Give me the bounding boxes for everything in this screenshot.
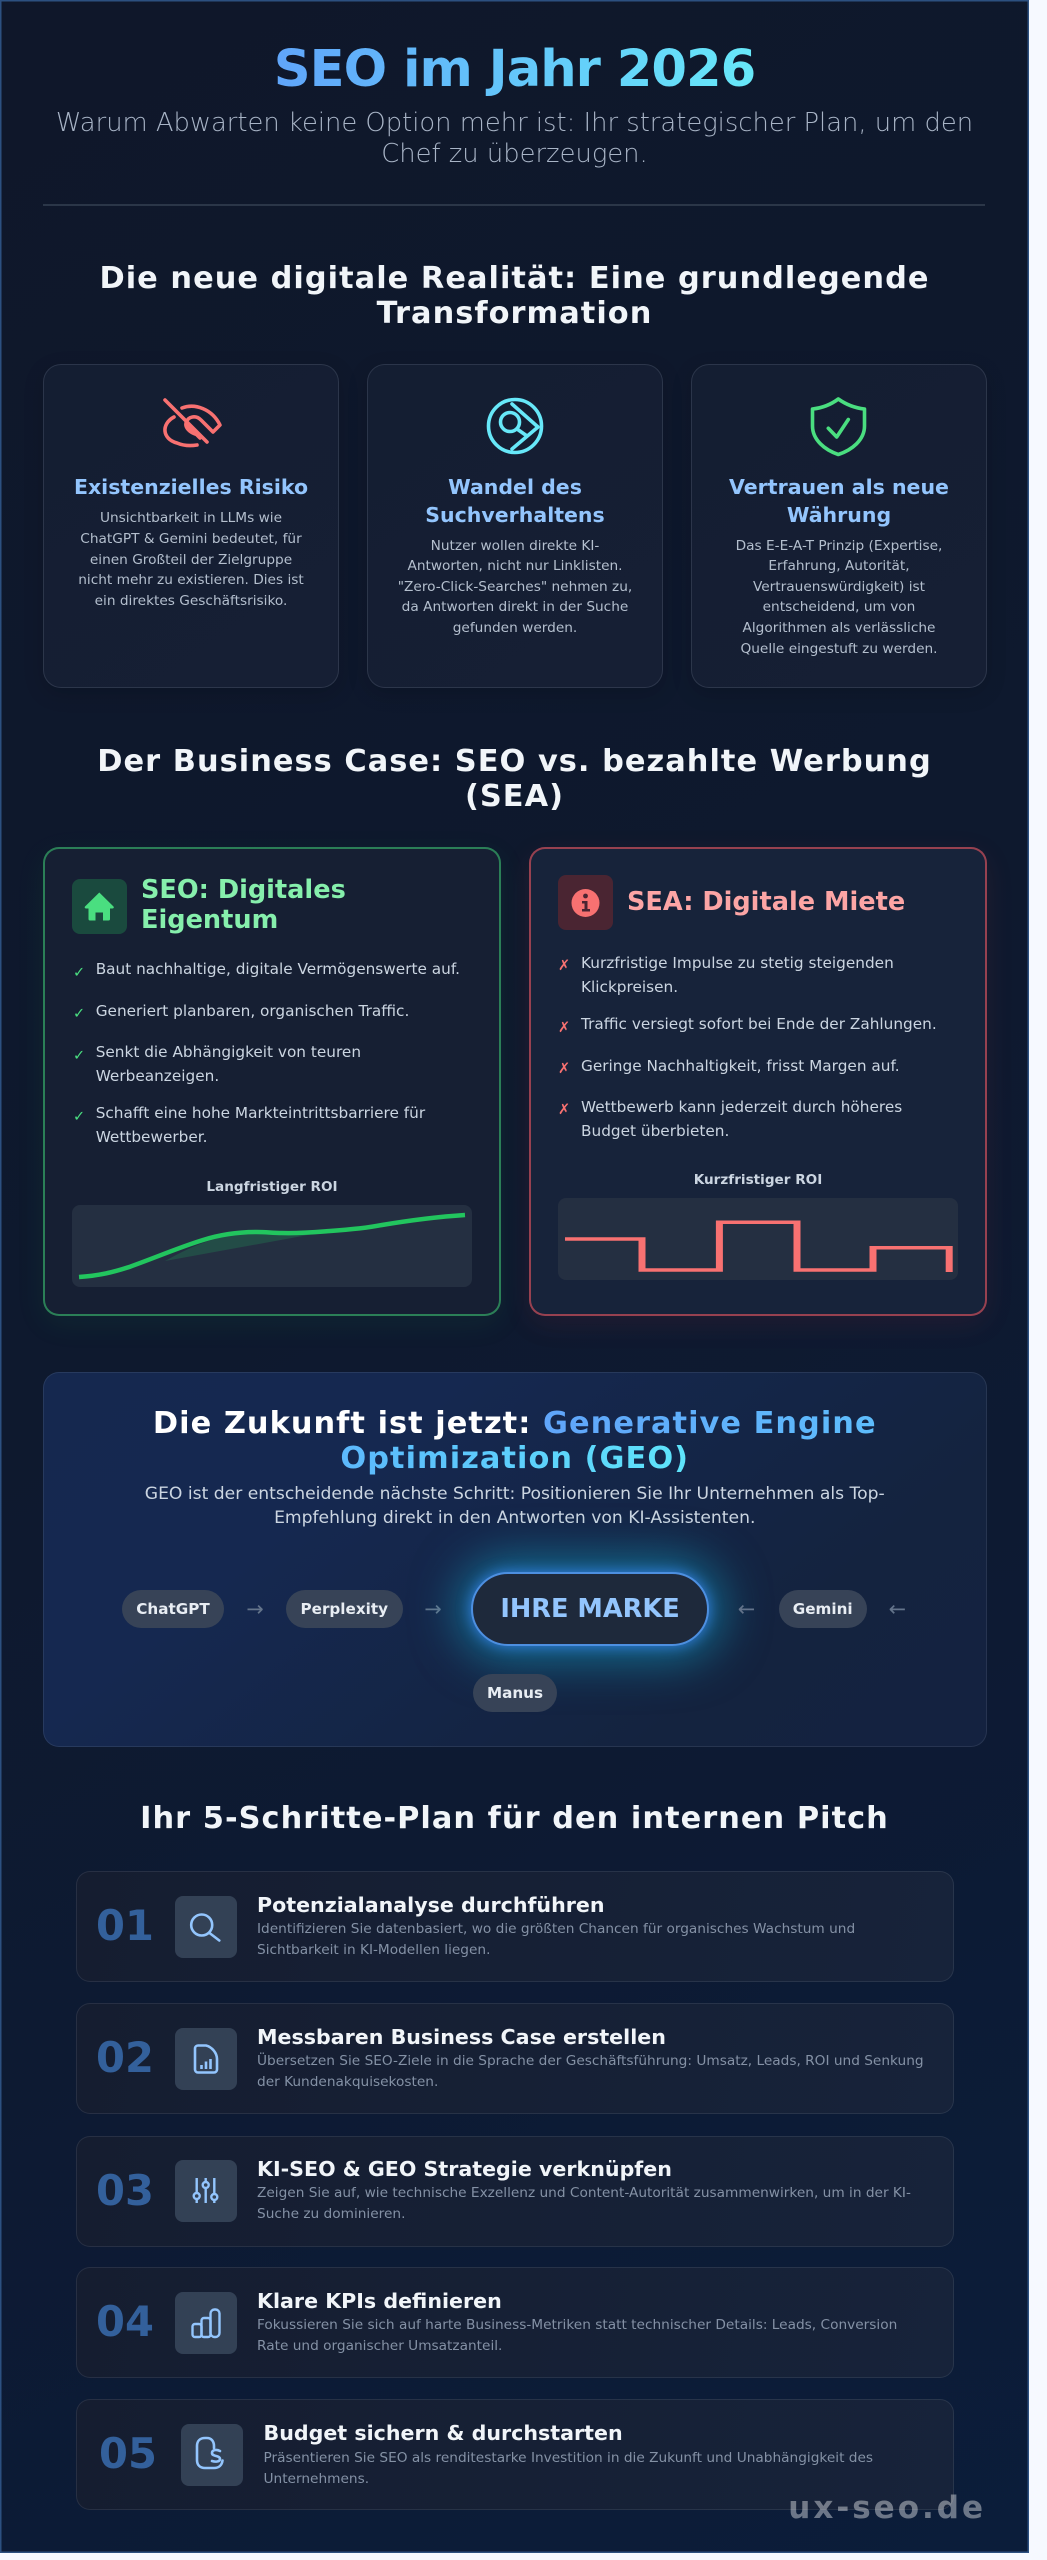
card text: ChatGPT & Gemini bedeutet, für bbox=[80, 531, 302, 547]
arrow: → bbox=[424, 1597, 442, 1621]
pill: Gemini bbox=[779, 1590, 867, 1628]
seo benefits list: ✓ bbox=[73, 1109, 85, 1125]
icon: magnifier bbox=[175, 1896, 237, 1958]
step text: Fokussieren Sie sich auf harte Business-Metriken statt technischer Details: Leads, Conversion bbox=[257, 2317, 897, 2333]
icon: eye off bbox=[163, 398, 222, 448]
step text bbox=[257, 2317, 897, 2354]
geo heading: Optimization (GEO) bbox=[340, 1440, 689, 1476]
step text: Suche zu dominieren. bbox=[257, 2206, 405, 2222]
subtitle: Chef zu überzeugen. bbox=[381, 138, 648, 168]
card text: Nutzer wollen direkte KI- bbox=[431, 538, 599, 554]
step 5 bbox=[76, 2399, 954, 2510]
divider bbox=[43, 204, 985, 206]
step text bbox=[257, 2052, 924, 2090]
card text: nicht mehr zu existieren. Dies ist bbox=[78, 572, 304, 588]
pill: Manus bbox=[473, 1674, 557, 1712]
step text: Zeigen Sie auf, wie technische Exzellenz und Content-Autorität zusammenwirken, um in der KI- bbox=[257, 2185, 911, 2201]
icon: shield check bbox=[810, 397, 866, 456]
card title: Wandel des bbox=[448, 475, 582, 499]
step title: Potenzialanalyse durchführen bbox=[257, 1893, 605, 1917]
heading: digitale Realität: Die neue digitale Realität: Eine grundlegende bbox=[99, 260, 930, 296]
heading: digitale Realität bbox=[99, 260, 930, 330]
icon: house bbox=[72, 879, 126, 934]
card text: da Antworten direkt in der Suche bbox=[402, 599, 628, 615]
icon: bar chart bbox=[175, 2292, 237, 2354]
card title: Vertrauen als neue bbox=[729, 475, 949, 499]
heading: Business Case: Der Business Case: SEO vs. bezahlte Werbung bbox=[97, 744, 932, 778]
sea drawbacks list bbox=[558, 954, 937, 1140]
panel: GEO bbox=[43, 1372, 986, 1747]
step title: Messbaren Business Case erstellen bbox=[257, 2025, 666, 2049]
seo benefits list: Wettbewerber. bbox=[96, 1128, 208, 1146]
brand badge: IHRE MARKE bbox=[500, 1594, 680, 1624]
geo text: Empfehlung direkt in den Antworten von KI-Assistenten. bbox=[274, 1508, 755, 1528]
subtitle: Warum Abwarten keine Option mehr ist: Ihr strategischer Plan, um den bbox=[56, 108, 973, 138]
geo heading: Die Zukunft ist jetzt: Generative Engine bbox=[153, 1406, 877, 1440]
title: SEO im Jahr 2026 bbox=[274, 39, 755, 99]
pill: ChatGPT bbox=[122, 1590, 224, 1628]
card text: entscheidend, um von bbox=[763, 599, 915, 615]
card text: einen Großteil der Zielgruppe bbox=[90, 552, 292, 568]
chart title: Kurzfristiger ROI bbox=[694, 1172, 822, 1188]
pill: Perplexity bbox=[286, 1590, 402, 1628]
seo benefits list: Schafft eine hohe Markteintrittsbarriere für bbox=[96, 1104, 425, 1122]
step text bbox=[257, 2185, 911, 2222]
pill: Gemini: Gemini bbox=[793, 1600, 853, 1618]
step text bbox=[257, 1921, 855, 1958]
pill: Perplexity: Perplexity bbox=[301, 1600, 388, 1618]
step text: Rate und organischer Umsatzanteil. bbox=[257, 2338, 502, 2354]
step text bbox=[264, 2450, 873, 2487]
heading: Business Case: (SEA) bbox=[465, 778, 564, 814]
sea drawbacks list: ✗ bbox=[558, 1102, 570, 1118]
seo benefits list: ✓ bbox=[73, 1006, 85, 1022]
card text: Unsichtbarkeit in LLMs wie bbox=[100, 510, 282, 526]
step chart: short-term ROI bbox=[558, 1198, 958, 1280]
number: 05 bbox=[99, 2429, 157, 2478]
sea drawbacks list: Geringe Nachhaltigkeit, frisst Margen auf. bbox=[581, 1057, 900, 1075]
seo benefits list: Senkt die Abhängigkeit von teuren bbox=[96, 1043, 361, 1061]
step title: Budget sichern & durchstarten bbox=[264, 2421, 623, 2445]
step text: Präsentieren Sie SEO als renditestarke Investition in die Zukunft und Unabhängigkeit des bbox=[264, 2450, 873, 2466]
step title: KI-SEO & GEO Strategie verknüpfen bbox=[257, 2157, 672, 2181]
icon: money device bbox=[181, 2424, 243, 2486]
sea drawbacks list: Traffic versiegt sofort bei Ende der Zahlungen. bbox=[581, 1015, 937, 1033]
card text: Quelle eingestuft zu werden. bbox=[740, 641, 938, 657]
card title: Existenzielles Risiko bbox=[74, 475, 308, 499]
chart title: Langfristiger ROI bbox=[206, 1179, 338, 1195]
icon: info bbox=[558, 875, 613, 930]
panel: Wandel des Suchverhaltens bbox=[367, 364, 663, 688]
pill: Manus: Manus bbox=[487, 1684, 543, 1702]
seo title: SEO: Digitales bbox=[141, 874, 346, 904]
step 3 bbox=[76, 2136, 954, 2247]
sea drawbacks list: ✗ bbox=[558, 1061, 570, 1077]
heading: digitale Realität: Transformation bbox=[377, 296, 652, 330]
panel: Vertrauen als neue Währung bbox=[691, 364, 987, 688]
geo text bbox=[145, 1484, 885, 1528]
panel: Existenzielles Risiko bbox=[43, 364, 339, 688]
arrow: ← bbox=[738, 1597, 755, 1621]
sea drawbacks list: Wettbewerb kann jederzeit durch höheres bbox=[581, 1098, 902, 1116]
number: 02 bbox=[96, 2033, 154, 2082]
card text bbox=[398, 538, 632, 636]
step text: Identifizieren Sie datenbasiert, wo die größten Chancen für organisches Wachstum und bbox=[257, 1921, 855, 1937]
arrow: ← bbox=[889, 1597, 906, 1621]
icon: sliders bbox=[175, 2160, 237, 2222]
number: 01 bbox=[96, 1901, 154, 1950]
step title: Klare KPIs definieren bbox=[257, 2289, 502, 2313]
geo heading bbox=[153, 1406, 877, 1476]
seo benefits list: Werbeanzeigen. bbox=[96, 1067, 219, 1085]
card text bbox=[78, 510, 304, 609]
arrow: → bbox=[246, 1597, 264, 1621]
brand badge bbox=[471, 1572, 709, 1646]
card text: Erfahrung, Autorität, bbox=[768, 558, 910, 574]
heading: 5 steps: Ihr 5-Schritte-Plan für den internen Pitch bbox=[140, 1800, 889, 1836]
card text bbox=[736, 538, 942, 657]
seo benefits list bbox=[73, 960, 460, 1146]
panel: SEO bbox=[43, 847, 501, 1316]
step 1 bbox=[76, 1871, 954, 1982]
step text: Sichtbarkeit in KI-Modellen liegen. bbox=[257, 1942, 490, 1958]
seo benefits list: ✓ bbox=[73, 965, 85, 981]
icon: search in circle bbox=[486, 398, 544, 454]
seo benefits list: Generiert planbaren, organischen Traffic. bbox=[96, 1002, 409, 1020]
sea drawbacks list: Klickpreisen. bbox=[581, 978, 678, 996]
sea title: SEA: Digitale Miete bbox=[627, 887, 905, 917]
step text: Unternehmens. bbox=[264, 2471, 369, 2487]
card text: ein direktes Geschäftsrisiko. bbox=[95, 593, 287, 609]
panel: SEA bbox=[529, 847, 987, 1316]
seo benefits list: Baut nachhaltige, digitale Vermögenswerte auf. bbox=[96, 960, 460, 978]
sea drawbacks list: Kurzfristige Impulse zu stetig steigenden bbox=[581, 954, 894, 972]
watermark: ux-seo.de bbox=[788, 2490, 986, 2526]
card text: Vertrauenswürdigkeit) ist bbox=[753, 579, 925, 595]
seo title: Eigentum bbox=[141, 905, 278, 935]
card text: "Zero-Click-Searches" nehmen zu, bbox=[398, 579, 632, 595]
card text: Algorithmen als verlässliche bbox=[742, 620, 935, 636]
card title: Suchverhaltens bbox=[425, 502, 605, 526]
card title: Währung bbox=[787, 502, 891, 526]
seo benefits list: ✓ bbox=[73, 1048, 85, 1064]
step 2 bbox=[76, 2003, 954, 2114]
step 4 bbox=[76, 2267, 954, 2378]
geo text: GEO ist der entscheidende nächste Schritt: Positionieren Sie Ihr Unternehmen als Top- bbox=[145, 1484, 885, 1504]
card text: Das E-E-A-T Prinzip (Expertise, bbox=[736, 538, 942, 554]
number: 03 bbox=[96, 2166, 154, 2215]
step text: der Kundenakquisekosten. bbox=[257, 2074, 438, 2090]
sea drawbacks list: ✗ bbox=[558, 1020, 570, 1036]
pill: ChatGPT: ChatGPT bbox=[136, 1600, 210, 1618]
card text: Antworten, nicht nur Linklisten. bbox=[407, 558, 623, 574]
seo title bbox=[141, 874, 346, 935]
subtitle bbox=[56, 108, 973, 168]
sea drawbacks list: ✗ bbox=[558, 958, 570, 974]
icon: document chart bbox=[175, 2028, 237, 2090]
card title bbox=[729, 475, 949, 526]
sea drawbacks list: Budget überbieten. bbox=[581, 1122, 729, 1140]
card title bbox=[425, 475, 605, 526]
line chart: long-term ROI bbox=[72, 1205, 472, 1287]
heading: Business Case bbox=[97, 744, 932, 814]
number: 04 bbox=[96, 2297, 154, 2346]
card text: gefunden werden. bbox=[453, 620, 577, 636]
step text: Übersetzen Sie SEO-Ziele in die Sprache der Geschäftsführung: Umsatz, Leads, ROI und Senkung bbox=[257, 2053, 924, 2069]
